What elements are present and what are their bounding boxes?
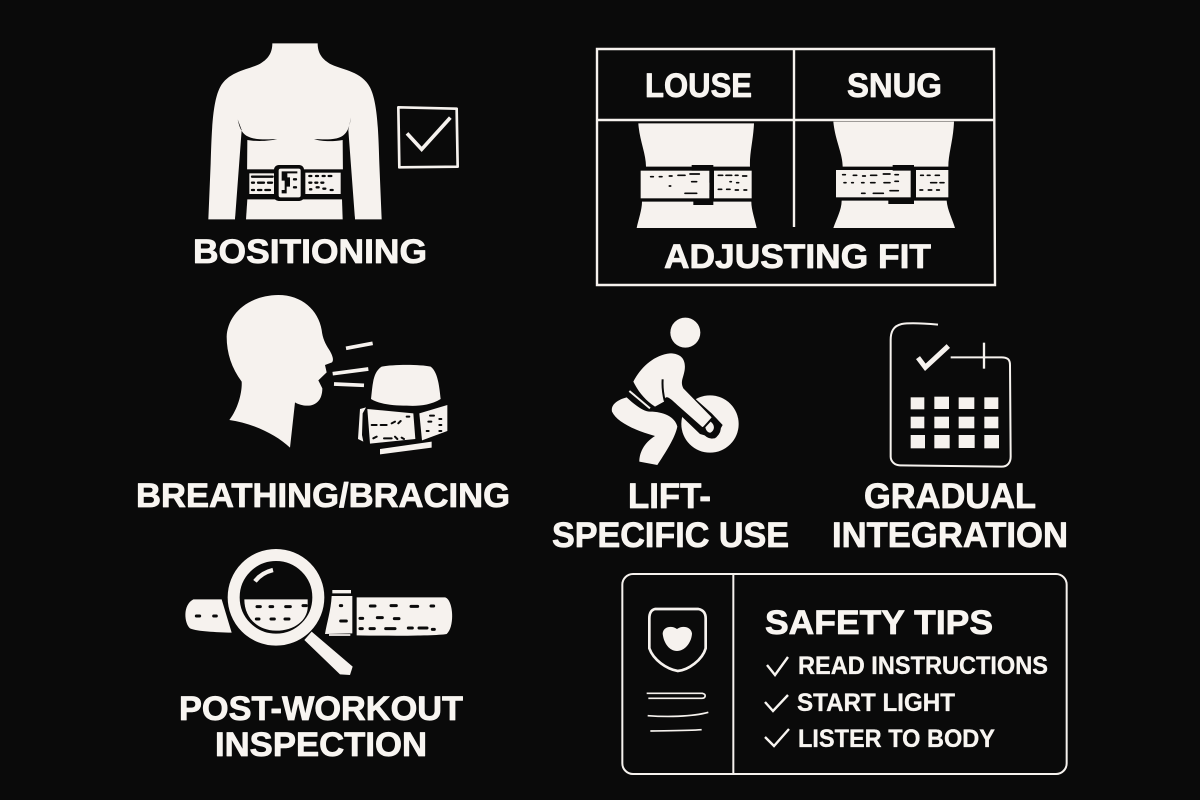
list item: read instructions: READ INSTRUCTIONS (798, 652, 1048, 680)
icon: loose belt (637, 123, 757, 228)
icon: checkbox (398, 107, 458, 167)
panel: breathing and bracing (136, 295, 510, 515)
belt (625, 387, 654, 412)
breath lines (333, 343, 373, 385)
panel frame (597, 49, 995, 285)
icon: shield (649, 609, 706, 671)
heading: specific use label: SPECIFIC USE (552, 516, 789, 555)
heading: breathing label: BREATHING/BRACING (136, 477, 510, 515)
panel: positioning (193, 43, 458, 271)
list item: start light: START LIGHT (797, 689, 955, 717)
panel: lift-specific use (552, 318, 789, 555)
heading: adjusting fit label: ADJUSTING FIT (664, 238, 931, 276)
panel: safety tips (622, 574, 1067, 774)
heading: lift label: LIFT- (628, 477, 711, 516)
label: snug: SNUG (847, 67, 942, 105)
icon: text lines (647, 693, 708, 731)
icon: lifter with plate (612, 318, 739, 465)
heading: integration label: INTEGRATION (832, 516, 1068, 555)
panel: adjusting fit (597, 49, 995, 285)
icon: head profile (227, 295, 373, 448)
heading: post-workout label: POST-WORKOUT (179, 690, 463, 728)
label: loose: LOUSE (645, 67, 752, 105)
panel: post-workout inspection (179, 555, 463, 764)
heading: safety tips: SAFETY TIPS (765, 604, 993, 642)
heading: positioning label: BOSITIONING (193, 233, 427, 271)
panel frame (622, 574, 1067, 774)
arm gaps (235, 119, 277, 219)
list item: listen to body: LISTER TO BODY (798, 725, 995, 753)
calendar check (918, 346, 948, 367)
torso/arm crease (662, 379, 665, 401)
icon: belted waist (358, 365, 447, 454)
heading: inspection label: INSPECTION (215, 726, 427, 764)
magnifier (234, 555, 318, 640)
heading: gradual label: GRADUAL (864, 477, 1036, 516)
black shadow around arm (663, 388, 723, 438)
belt (249, 173, 275, 194)
belt perforations (196, 606, 434, 629)
panel: gradual integration (832, 323, 1068, 555)
icon: torso with belt (208, 43, 382, 219)
hand ring (702, 417, 719, 437)
icon: belt under magnifier (185, 555, 452, 675)
calendar days (911, 397, 999, 448)
icon: snug belt (833, 122, 955, 228)
icon: calendar (891, 323, 1011, 467)
